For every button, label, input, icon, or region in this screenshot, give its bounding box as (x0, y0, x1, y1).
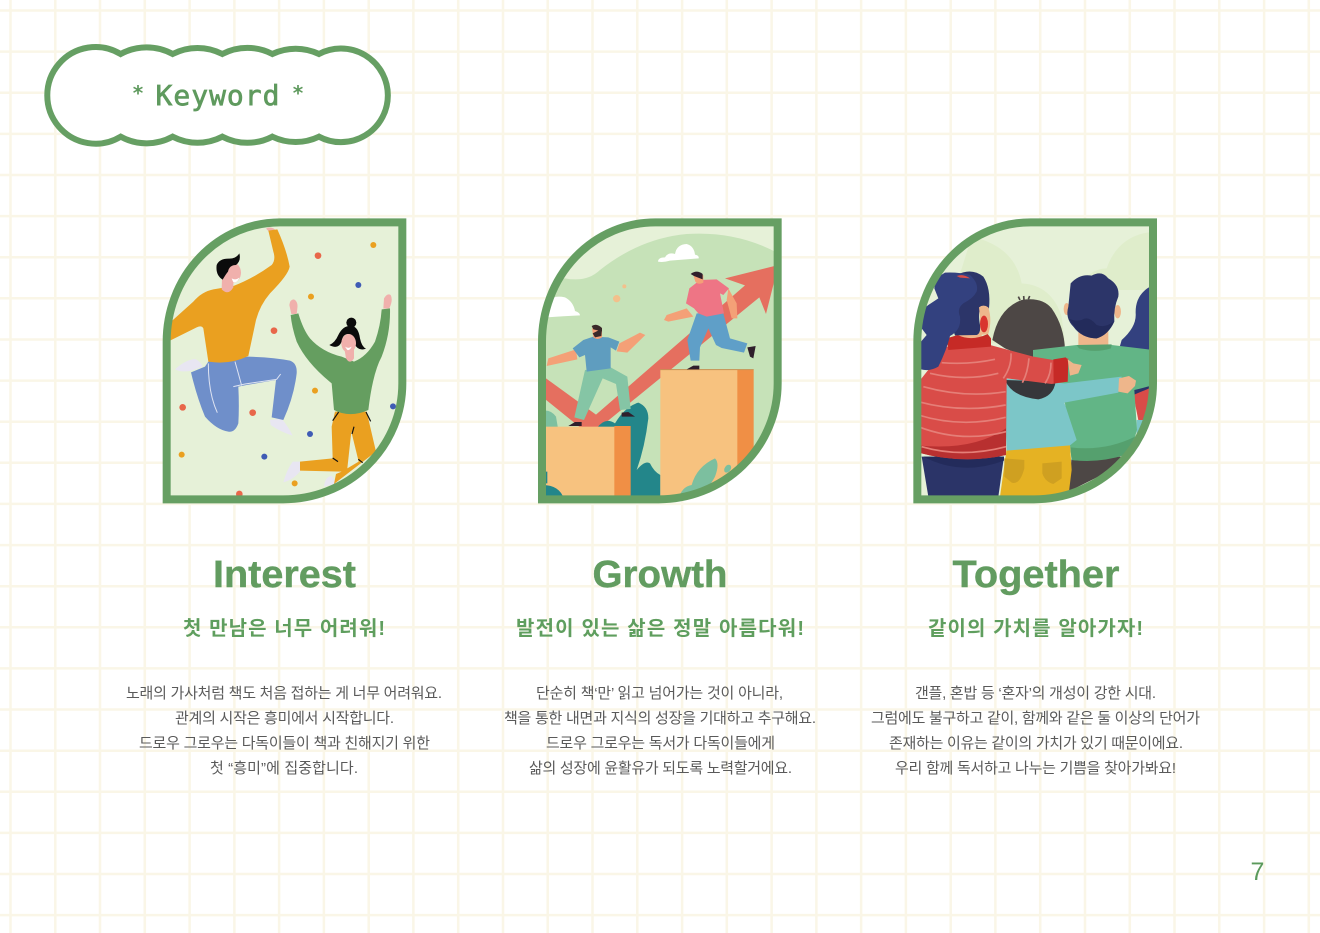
text block: Growth body: 삶의 성장에 윤활유가 되도록 노력할거에요. (529, 760, 792, 777)
frame: Interest leaf (167, 222, 402, 499)
figure: green sweater (1033, 344, 1153, 492)
small dots (613, 284, 626, 302)
text block: Together body: 갠플, 혼밥 등 ‘혼자’의 개성이 강한 시대. (915, 685, 1156, 702)
frame: Together leaf (917, 222, 1153, 499)
text block: Interest body (126, 685, 442, 777)
background shapes (938, 232, 1153, 343)
clouds (547, 244, 699, 317)
dots (179, 242, 396, 497)
text block: Interest body: 노래의 가사처럼 책도 처음 접하는 게 너무 어려워요. (126, 685, 442, 702)
subheading: Together: 같이의 가치를 알아가자! (928, 617, 1143, 640)
text block: Together body (871, 685, 1200, 777)
text block: Growth body: 책을 통한 내면과 지식의 성장을 기대하고 추구해요. (504, 710, 816, 727)
plants (540, 403, 660, 500)
text block: Interest body: 드로우 그로우는 다독이들이 책과 친해지기 위한 (139, 735, 430, 752)
panel: Growth illustration (538, 218, 782, 504)
background hill (546, 234, 774, 475)
figure: jumping woman (283, 294, 392, 487)
badge: Keyword cloud label (47, 47, 388, 144)
figure: man on low box (547, 325, 645, 426)
column: Interest text (126, 554, 442, 777)
text block: Growth body: 드로우 그로우는 독서가 다독이들에게 (546, 735, 775, 752)
boxes (540, 370, 754, 500)
panel: Together illustration (913, 218, 1157, 504)
badge: Keyword cloud label: * (132, 81, 144, 105)
figure: man on high box (664, 272, 756, 369)
heading: Interest: Interest (213, 554, 356, 596)
text block: Growth body: 단순히 책‘만’ 읽고 넘어가는 것이 아니라, (536, 685, 783, 702)
subheading: Growth: 발전이 있는 삶은 정말 아름다워! (516, 617, 804, 640)
text block: Interest body: 관계의 시작은 흥미에서 시작합니다. (175, 709, 394, 727)
figure: middle person lower body (1000, 376, 1136, 497)
column: Growth text (504, 554, 816, 777)
figure: jumping man (170, 227, 297, 436)
text block: Growth body (504, 685, 816, 777)
badge: Keyword cloud label: * (292, 81, 304, 105)
badge: Keyword cloud label: Keyword (156, 79, 280, 112)
page number: 7 (1251, 858, 1264, 886)
arrow (540, 265, 778, 430)
text block: Together body: 우리 함께 독서하고 나누는 기쁨을 찾아가봐요! (895, 760, 1176, 777)
figure: woman with red sweater (915, 272, 1082, 497)
panel: Interest illustration (162, 218, 406, 504)
heading: Growth: Growth (592, 554, 728, 596)
figure: far-right person (1120, 287, 1149, 434)
figure: right person head (1064, 273, 1121, 348)
subheading: Interest: 첫 만남은 너무 어려워! (183, 617, 385, 640)
text block: Together body: 존재하는 이유는 같이의 가치가 있기 때문이에요. (889, 735, 1183, 752)
text block: Together body: 그럼에도 불구하고 같이, 함께와 같은 둘 이상의 단어가 (871, 710, 1200, 727)
text block: Interest body: 첫 “흥미”에 집중합니다. (210, 759, 358, 777)
figure: middle person hair (992, 296, 1065, 360)
frame: Growth leaf (542, 222, 778, 499)
column: Together text (871, 554, 1200, 777)
heading: Together: Together (952, 554, 1120, 596)
